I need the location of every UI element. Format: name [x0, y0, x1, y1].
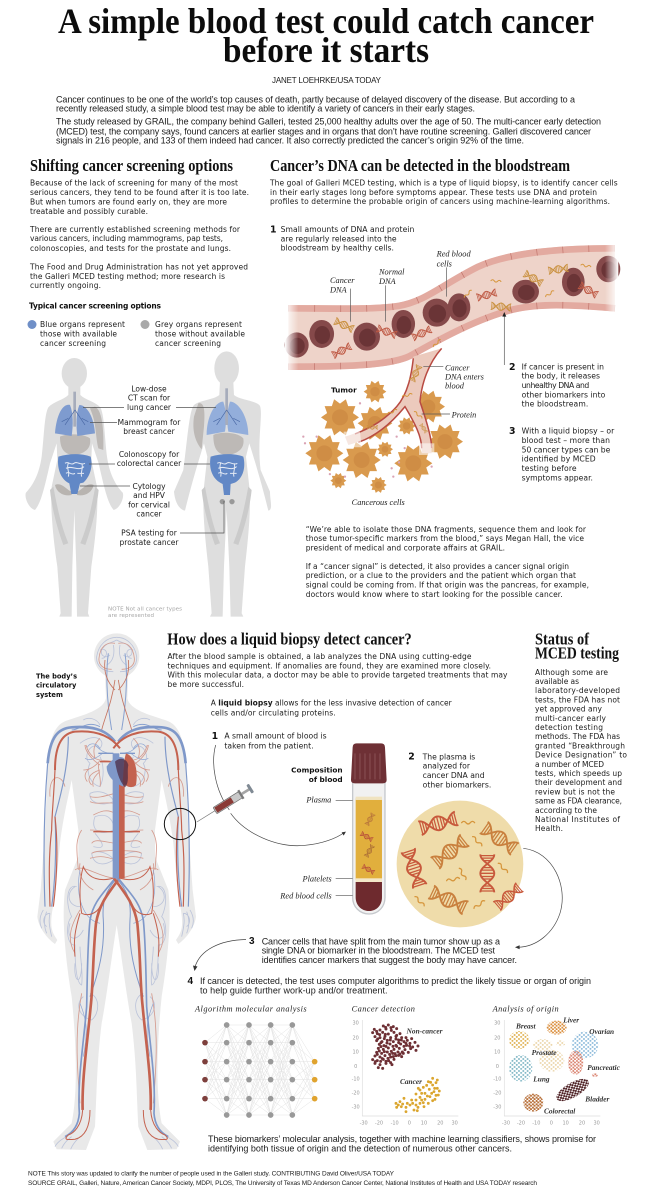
chart: analysis of origin: -20: [493, 1091, 501, 1097]
labels: screening methods: Mammogram for: [118, 418, 181, 427]
chart: analysis of origin: 30: [494, 1020, 500, 1026]
chart: analysis of origin: Ovarian: [589, 1027, 614, 1036]
cancerous cells: [303, 381, 463, 493]
heart: [107, 753, 137, 787]
text block: quote: those tumor-specific markers from the blood,” says Megan Hall, the vice: [306, 534, 584, 543]
labels: screening methods: colorectal cancer: [117, 459, 182, 468]
chart: analysis of origin: [492, 1005, 621, 1126]
chart: analysis of origin: Prostate: [532, 1048, 557, 1057]
text block: screening: The Food and Drug Administration has not yet approved: [29, 262, 248, 272]
text block: quote: doctors would know where to start looking for the possible cancer.: [306, 590, 563, 599]
note: cancer types: are represented: [108, 613, 154, 619]
callouts: vessel labels: [329, 250, 506, 507]
chart: analysis of origin: Pancreatic: [587, 1063, 621, 1072]
label: circulatory system: circulatory: [36, 682, 77, 690]
chart: cancer detection: Cancer: [400, 1077, 422, 1086]
text block: Galleri goal: profiles to determine the probable origin of cancers using machine-learning algorithms.: [270, 197, 610, 206]
vessels: [40, 637, 193, 1149]
text block: status: same as FDA clearance,: [535, 797, 622, 806]
text block: status: Health.: [535, 824, 563, 833]
labels: screening methods: Colonoscopy for: [119, 450, 180, 459]
step 2: other biomarkers.: [423, 780, 491, 789]
text block: blood sample: be more successful.: [168, 680, 244, 689]
chart: analysis of origin: -10: [532, 1120, 540, 1126]
text block: status: Device Designation” to: [535, 751, 627, 760]
panel: status of MCED testing: [535, 629, 627, 833]
text block: quote: president of medical and corporate affairs at GRAIL.: [306, 544, 505, 552]
text block: screening: There are currently established screening methods for: [29, 225, 241, 234]
text block: status: Although some are: [535, 668, 608, 677]
chart: analysis of origin: Breast: [515, 1022, 536, 1031]
text block: status: a number of MCED: [535, 760, 604, 769]
text block: biomarkers summary: identifying both tissue of origin and the detection of numerous other cancers.: [208, 1144, 512, 1154]
text block: status: National Institutes of: [535, 815, 620, 824]
text block: liquid biopsy definition: cells and/or circulating proteins.: [211, 708, 336, 717]
heading: liquid biopsy: How does a liquid biopsy detect cancer?: [167, 629, 412, 648]
legend: grey organs: those without available: [155, 330, 245, 338]
step 4: [188, 976, 591, 995]
text block: quote: “We’re able to isolate those DNA fragments, sequence them and look for: [306, 525, 587, 534]
heading: shifting options: Shifting cancer screening options: [30, 156, 233, 175]
labels: screening methods: Low-dose: [131, 384, 167, 394]
labels: screening methods: cancer: [136, 510, 163, 519]
step 1: [270, 224, 414, 253]
chart: analysis of origin: Lung: [532, 1074, 550, 1083]
callouts: vessel labels: Red blood: [436, 250, 471, 259]
label: circulatory system: The body’s: [36, 672, 77, 680]
legend: blue organs: Blue organs represent: [40, 320, 125, 329]
text block: status: according to the: [535, 806, 597, 815]
panel: shifting cancer screening options: [26, 156, 271, 619]
chart: analysis of origin: -20: [517, 1120, 525, 1126]
chart: cancer detection: 30: [352, 1020, 359, 1026]
intro text: signals in 216 people, and 133 of them indeed had cancer. It also correctly predicted the cancer’s origin 92% of the time.: [56, 136, 524, 146]
text block: blood sample: techniques and equipment. If anomalies are found, they are examined more closely.: [168, 661, 491, 670]
chart: cancer detection: 30: [451, 1120, 458, 1126]
chart: cancer detection: Non-cancer: [406, 1027, 443, 1036]
text block: quote: [306, 525, 589, 599]
text block: blood sample: [168, 652, 508, 689]
chart: analysis of origin: Colorectal: [544, 1106, 576, 1115]
panel: how a liquid biopsy works: [167, 629, 621, 1154]
text block: status: available as: [535, 677, 579, 686]
chart: analysis of origin: Bladder: [584, 1094, 609, 1103]
step 3: 3: [509, 426, 515, 437]
labels: screening methods: Cytology: [132, 482, 166, 491]
step 1: taken from the patient.: [224, 741, 314, 750]
chart: cancer detection: -30: [352, 1105, 360, 1111]
chart: analysis of origin: 20: [494, 1036, 500, 1042]
step 2: [408, 751, 491, 789]
callouts: vessel labels: DNA enters: [444, 373, 484, 382]
body silhouette: [37, 633, 196, 1150]
illustration: circulatory system body: [36, 633, 196, 1150]
step 1: bloodstream by healthy cells.: [281, 244, 394, 253]
tube labels: Plasma: [305, 796, 331, 805]
step 3: identified by MCED: [522, 455, 596, 464]
step 2: cancer DNA and: [423, 771, 485, 780]
text block: Galleri goal: The goal of Galleri MCED testing, which is a type of liquid biopsy, is to identify cancer cells: [269, 178, 618, 188]
callouts: vessel labels: Cancer: [445, 364, 470, 373]
intro text: Cancer continues to be one of the world’s top causes of death, partly because of delayed discovery of the disease. But according to a: [56, 94, 575, 104]
chart: analysis of origin: Analysis of origin: [492, 1005, 559, 1014]
step 3: single DNA or biomarker in the bloodstream. The MCED test: [262, 946, 495, 956]
text block: quote: signal could be coming from. If that origin was the pancreas, for example,: [306, 580, 589, 590]
step 2: other biomarkers into: [522, 390, 606, 399]
chart: analysis of origin: -30: [502, 1120, 510, 1126]
text block: liquid biopsy definition: A liquid biopsy allows for the less invasive detection of cancer: [211, 699, 453, 708]
chart: cancer detection: -20: [352, 1091, 360, 1097]
footer: note and source: NOTE This story was updated to clarify the number of people used in the Galleri study. CONTRIBUTING David Oliver/USA TODAY: [28, 1170, 395, 1178]
heading: cancer's DNA: Cancer’s DNA can be detected in the bloodstream: [270, 156, 570, 175]
text block: status: multi-cancer early: [535, 714, 607, 723]
note: cancer types: [108, 606, 182, 619]
step 4: 4: [188, 976, 194, 987]
intro text: The study released by GRAIL, the company behind Galleri, tested 25,000 healthy adults over the age of 50. The multi-cancer early detection: [56, 117, 601, 127]
step 3: symptoms appear.: [522, 473, 593, 482]
charts row: [194, 1005, 621, 1126]
label: circulatory system: [36, 672, 77, 699]
chart: cancer detection: -10: [352, 1077, 360, 1083]
callouts: vessel labels: Normal: [378, 267, 405, 276]
heading: status: MCED testing: [535, 643, 619, 662]
labels: screening methods: CT scan for: [128, 394, 171, 403]
text block: biomarkers summary: [208, 1134, 596, 1154]
callouts: vessel labels: DNA: [378, 277, 397, 286]
callouts: vessel labels: DNA: [329, 286, 348, 295]
text block: status: tests, which speeds up: [535, 769, 622, 778]
step 1: 1: [212, 731, 218, 742]
chart: cancer detection: -20: [375, 1120, 383, 1126]
intro text: recently released study, a simple blood test may be able to identify a variety of cancers in their early stages.: [56, 104, 475, 114]
labels: screening methods: [80, 384, 224, 547]
diagram: bloodstream: [270, 224, 620, 507]
byline: JANET LOEHRKE/USA TODAY: [272, 76, 382, 85]
text block: quote: If a “cancer signal” is detected, it also provides a cancer signal origin: [306, 562, 569, 571]
intro text: (MCED) test, the company says, found cancers at earlier stages and in organs that don’t have routine screening. Galleri discovered cancer: [56, 126, 591, 136]
chart: cancer detection: [352, 1005, 458, 1126]
text block: screening: currently ongoing.: [30, 281, 101, 290]
arrow: step 1 to tube: [214, 745, 346, 846]
title: [58, 1, 594, 70]
chart: cancer detection: -10: [391, 1120, 399, 1126]
chart: cancer detection: 10: [352, 1050, 359, 1056]
text block: status: granted “Breakthrough: [535, 741, 625, 750]
text block: status: yet approved any: [535, 705, 603, 714]
tube labels: [279, 766, 353, 901]
step 4: to help guide further work-up and/or treatment.: [200, 985, 388, 995]
chart: cancer detection: 20: [437, 1120, 443, 1126]
legend: blue organs: cancer screening: [40, 339, 106, 348]
intro text: [56, 94, 601, 146]
step 3: Cancer cells that have split from the main tumor show up as a: [262, 937, 500, 947]
callouts: vessel labels: Protein: [451, 410, 476, 419]
legend: blue organs: [28, 320, 125, 348]
panel: cancer's DNA: [269, 156, 620, 599]
step 3: [249, 936, 517, 965]
subheading: typical options: Typical cancer screening options: [29, 302, 162, 310]
text block: screening: [29, 178, 249, 290]
text block: status: methods. The FDA has: [535, 732, 620, 741]
step 3: With a liquid biopsy – or: [522, 427, 615, 436]
step 3: identifies cancer markers that suggest the body may have cancer.: [262, 955, 517, 965]
chart: algorithm molecular analysis: [194, 1005, 317, 1118]
text block: screening: serious cancers, they tend to be found after it is too late.: [30, 188, 249, 197]
step 2: the body, it releases: [522, 372, 600, 381]
text block: screening: But when tumors are found early on, they are more: [30, 198, 227, 206]
chart: analysis of origin: -10: [493, 1077, 501, 1083]
chart: cancer detection: 0: [408, 1120, 411, 1126]
text block: Galleri goal: [269, 178, 618, 206]
text block: quote: prediction, or a clue to the providers and the patient which organ that: [306, 571, 576, 580]
text block: status: review but is not the: [535, 787, 615, 796]
steps diagram: [194, 731, 562, 949]
title: A simple blood test could catch cancer: [58, 1, 594, 41]
step 2: 2: [509, 362, 515, 373]
labels: screening methods: and HPV: [133, 491, 166, 500]
text block: screening: Because of the lack of screening for many of the most: [30, 178, 238, 188]
tube labels: Platelets: [302, 874, 332, 883]
text block: screening: the Galleri MCED testing method; more research is: [30, 272, 225, 281]
chart: cancer detection: Cancer detection: [352, 1005, 415, 1014]
text block: screening: treatable and possibly curable.: [30, 207, 148, 216]
chart: cancer detection: 20: [352, 1036, 359, 1042]
callouts: vessel labels: blood: [445, 382, 465, 391]
chart: analysis of origin: 0: [550, 1120, 553, 1126]
tube labels: Composition: [291, 766, 343, 775]
step 2: analyzed for: [423, 762, 471, 771]
chart: analysis of origin: 0: [496, 1064, 499, 1070]
chart: analysis of origin: Liver: [562, 1016, 579, 1025]
title: before it starts: [223, 30, 429, 70]
text block: status: detection testing: [535, 723, 603, 732]
heading: status: Status of: [535, 629, 589, 648]
footer: note and source: SOURCE GRAIL, Galleri, Nature, American Cancer Society, MDPI, PLOS, The University of Texas MD Anderson Cancer Center, National Institutes of Health and USA TODAY research: [28, 1180, 537, 1187]
footer: note and source: [28, 1170, 537, 1187]
red blood cells: [285, 243, 620, 373]
legend: grey organs: cancer screening: [155, 339, 221, 348]
chart: analysis of origin: 30: [593, 1120, 600, 1126]
callouts: vessel labels: Cancerous cells: [352, 498, 405, 507]
text block: status: tests, the FDA has not: [535, 695, 620, 704]
DNA strands: [331, 264, 599, 433]
callouts: vessel labels: cells: [437, 259, 452, 268]
chart: analysis of origin: -30: [493, 1105, 501, 1111]
figure: male body with organs: [174, 351, 271, 617]
step 2: The plasma is: [422, 752, 475, 761]
blood vessel: [288, 245, 615, 370]
note: cancer types: NOTE Not all cancer types: [108, 606, 182, 612]
text block: status: laboratory-developed: [535, 686, 620, 695]
step 4: If cancer is detected, the test uses computer algorithms to predict the likely tissue or organ of origin: [200, 976, 591, 986]
text block: screening: various cancers, including mammograms, pap tests,: [30, 234, 223, 243]
legend: grey organs: Grey organs represent: [155, 320, 242, 329]
chart: cancer detection: 0: [354, 1064, 357, 1070]
text block: biomarkers summary: These biomarkers’ molecular analysis, together with machine learning classifiers, shows promise for: [208, 1134, 596, 1144]
heading: status: [535, 629, 619, 662]
legend: blue organs: those with available: [40, 330, 117, 338]
labels: screening methods: PSA testing for: [121, 529, 178, 538]
arrow: step 3 to 4: [193, 940, 246, 971]
step 1: A small amount of blood is: [224, 732, 327, 741]
step 2: 2: [408, 751, 415, 762]
labels: screening methods: breast cancer: [123, 427, 176, 436]
callouts: vessel labels: Cancer: [330, 276, 355, 285]
step 3: blood test – more than: [522, 436, 610, 445]
plasma magnified circle: [397, 801, 523, 927]
text block: status: their development and: [535, 778, 622, 787]
chart: algorithm molecular analysis: Algorithm molecular analysis: [194, 1005, 307, 1014]
labels: screening methods: prostate cancer: [120, 538, 179, 547]
text block: status: [535, 668, 627, 833]
chart: analysis of origin: 20: [579, 1120, 585, 1126]
branch vessel: [344, 348, 442, 455]
label: circulatory system: system: [36, 691, 63, 699]
text block: screening: colonoscopies, and tests for the prostate and lungs.: [30, 244, 231, 253]
chart: analysis of origin: 10: [562, 1120, 569, 1126]
labels: screening methods: lung cancer: [127, 403, 172, 412]
arm circle: [164, 808, 196, 840]
step 3: testing before: [522, 464, 577, 473]
icon: blood tube: [351, 743, 387, 914]
text block: blood sample: After the blood sample is obtained, a lab analyzes the DNA using cutting-edge: [168, 652, 472, 661]
chart: cancer detection: 10: [421, 1120, 427, 1126]
chart: analysis of origin: 10: [494, 1050, 500, 1056]
arrow: circle to step 3: [515, 848, 562, 949]
callouts: vessel labels: Tumor: [331, 386, 357, 395]
step 3: [509, 426, 615, 482]
step 2: unhealthy DNA and: [522, 381, 589, 390]
tube labels: Red blood cells: [279, 892, 332, 901]
text block: blood sample: With this molecular data, a doctor may be able to provide targeted treatments that may: [168, 671, 508, 680]
step 1: [212, 731, 327, 750]
step 2: [509, 362, 606, 409]
labels: screening methods: for cervical: [128, 500, 170, 510]
step 2: If cancer is present in: [522, 362, 604, 371]
tube labels: of blood: [309, 775, 343, 784]
chart: cancer detection: -30: [360, 1120, 368, 1126]
legend: grey organs: [140, 320, 245, 348]
step 2: the bloodstream.: [522, 400, 588, 409]
text block: liquid biopsy definition: [211, 699, 453, 717]
step 1: are regularly released into the: [281, 234, 397, 243]
step 1: Small amounts of DNA and protein: [281, 225, 414, 234]
step 3: 50 cancer types can be: [522, 445, 611, 454]
step 3: 3: [249, 936, 255, 947]
text block: Galleri goal: in their early stages long before symptoms appear. These tests use DNA and protein: [270, 188, 597, 197]
figure: female body with organs: [26, 358, 123, 617]
icon: syringe: [194, 784, 254, 826]
step 1: 1: [270, 224, 276, 235]
